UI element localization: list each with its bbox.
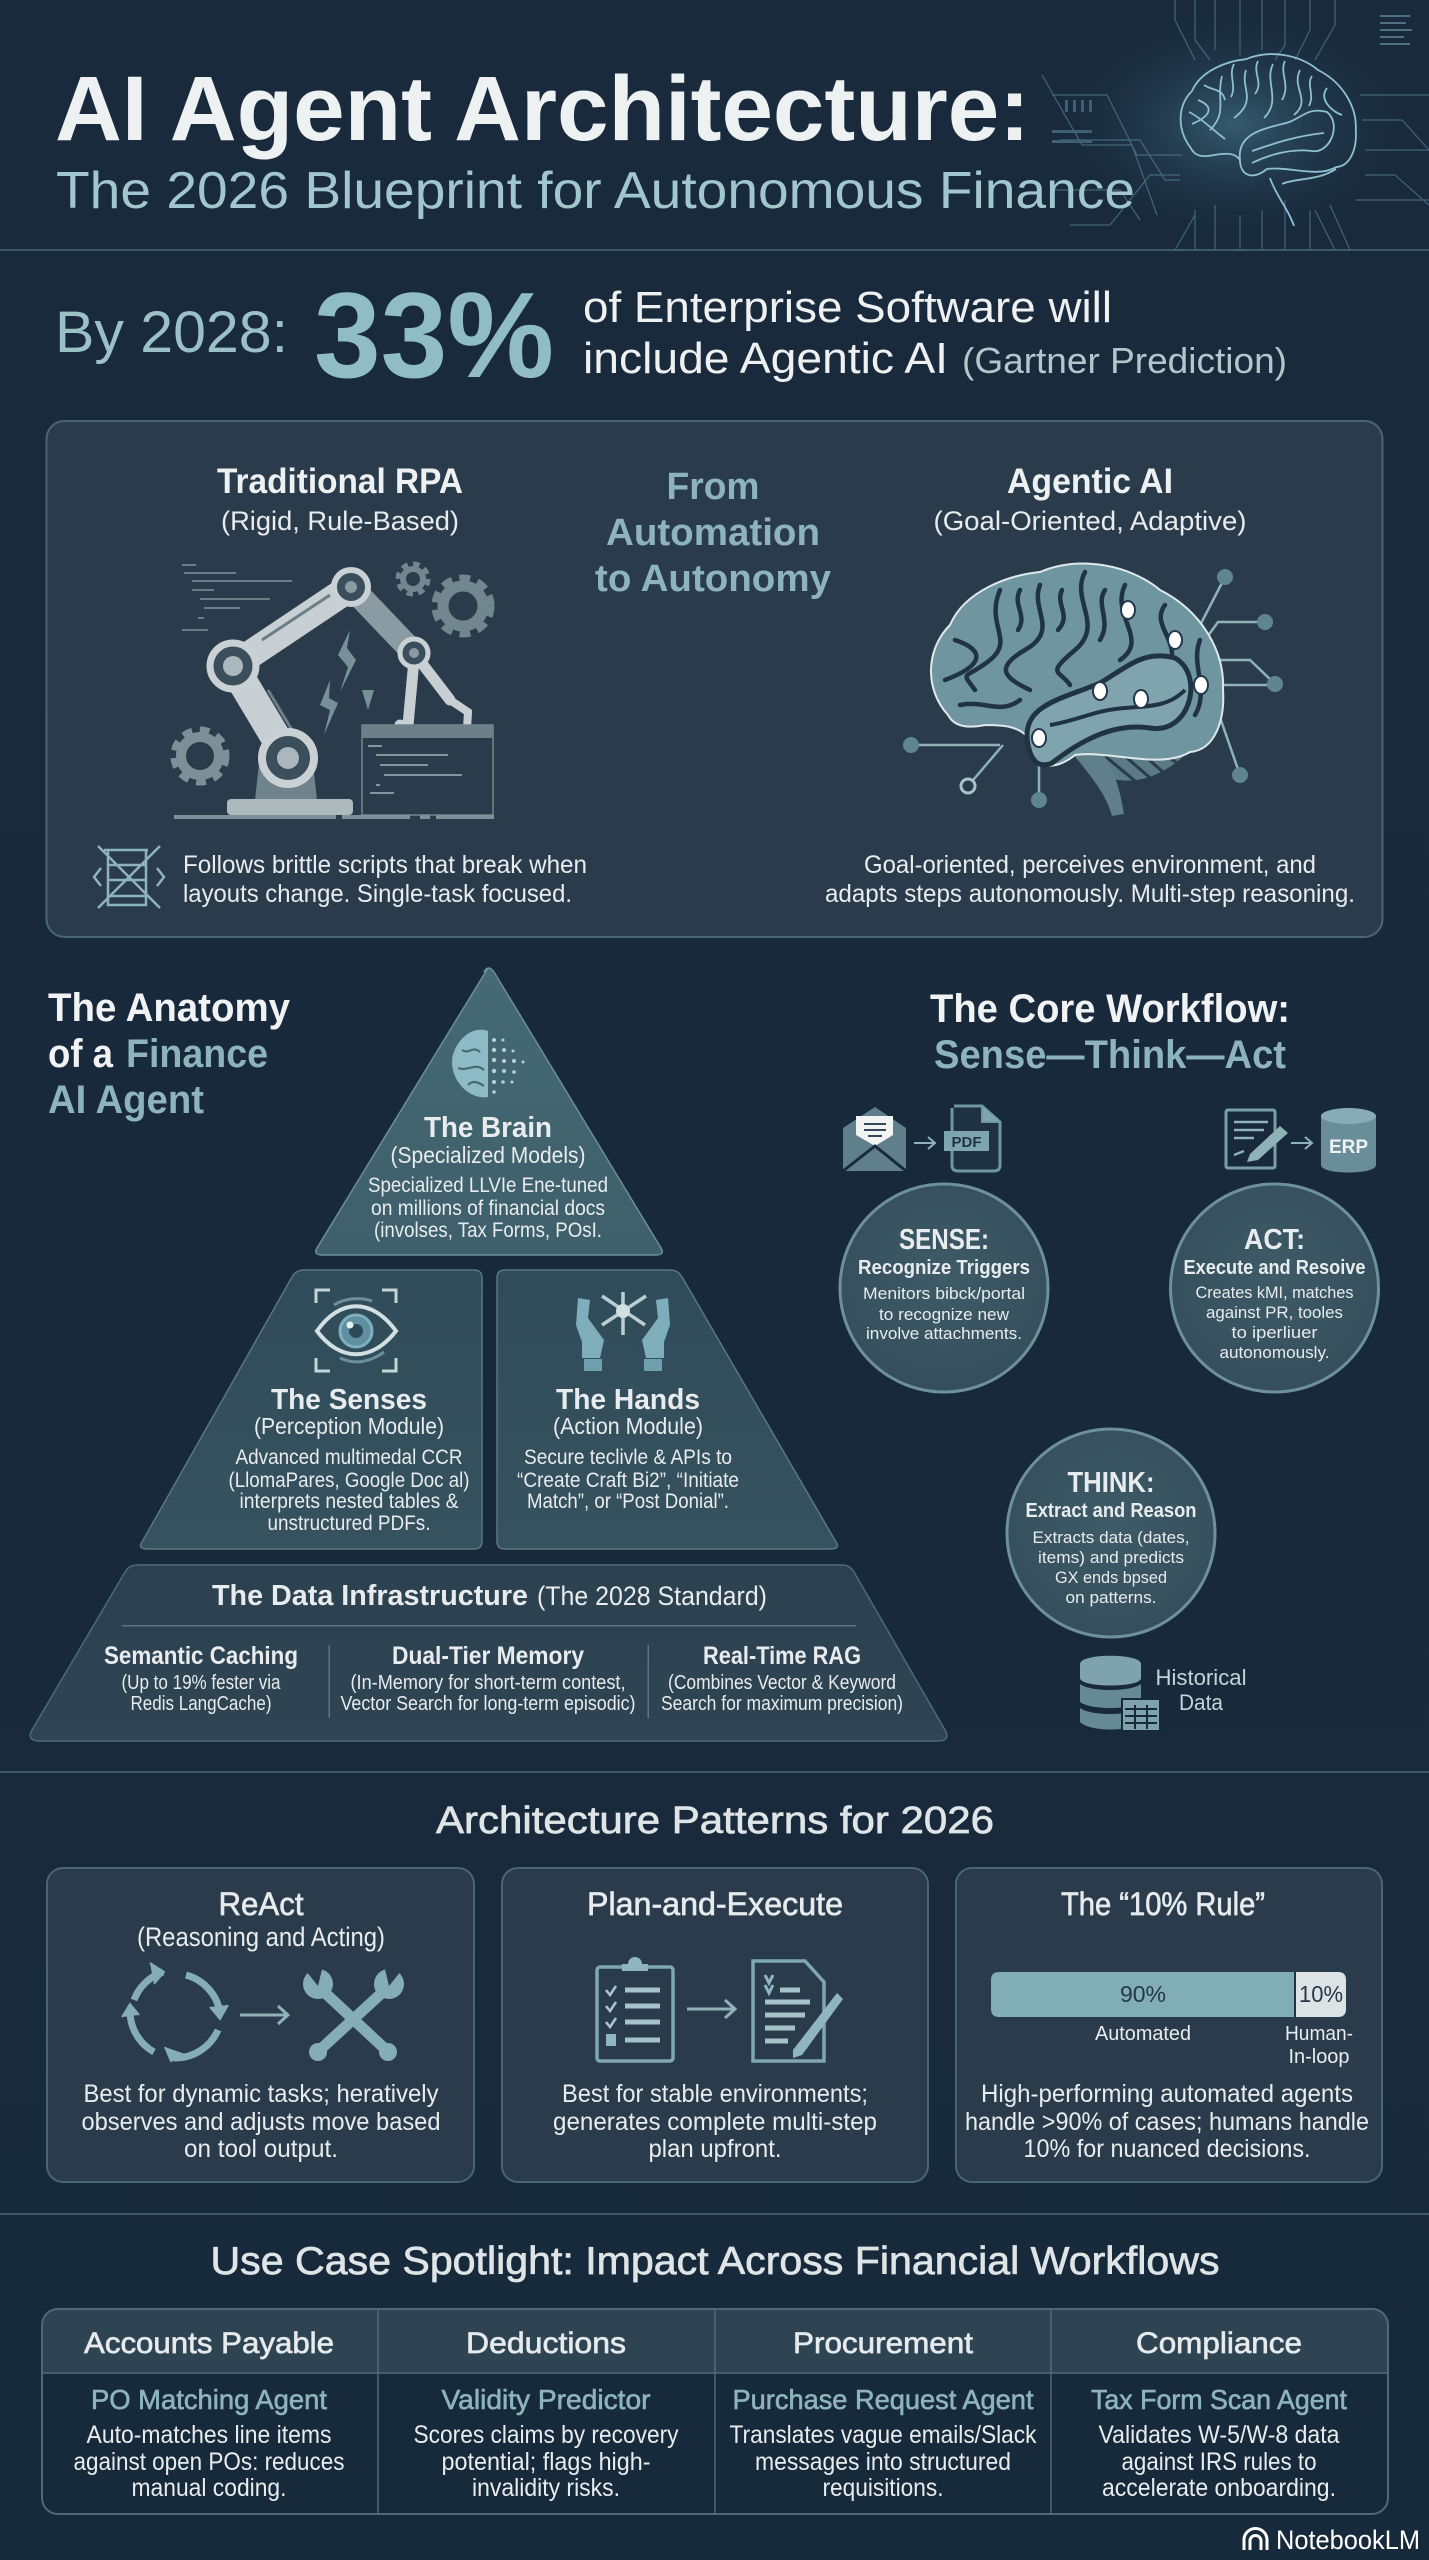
item: semantic caching: Redis LangCache) xyxy=(130,1693,272,1715)
card: the 10% rule: handle >90% of cases; humans handle xyxy=(965,2108,1369,2136)
heading: core workflow: The Core Workflow: xyxy=(930,987,1290,1031)
heading: anatomy of a finance AI agent: The Anatomy xyxy=(48,986,291,1030)
icon: historical data xyxy=(1080,1656,1246,1731)
column: accounts payable: against open POs: reduces xyxy=(74,2448,344,2476)
subtitle: The 2026 Blueprint for Autonomous Finance xyxy=(56,162,1135,220)
card: plan-and-execute xyxy=(502,1868,928,2182)
column: procurement: messages into structured xyxy=(755,2448,1011,2476)
heading: agentic AI: Agentic AI xyxy=(1007,462,1173,501)
logo: NotebookLM: NotebookLM xyxy=(1276,2525,1420,2555)
column: procurement: requisitions. xyxy=(822,2474,944,2502)
circle: act: autonomously. xyxy=(1220,1343,1330,1362)
icon: envelope to PDF: PDF xyxy=(952,1134,982,1151)
circle: sense: SENSE: xyxy=(899,1224,989,1256)
item: semantic caching xyxy=(104,1642,298,1715)
item: real-time RAG: Real-Time RAG xyxy=(703,1642,861,1670)
heading: use case spotlight: Use Case Spotlight: Impact Across Financial Workflows xyxy=(210,2240,1220,2283)
circle: act: to iperliuer xyxy=(1232,1323,1318,1342)
pyramid tier: the hands: The Hands xyxy=(556,1384,700,1416)
item: real-time RAG xyxy=(661,1642,903,1715)
item: dual-tier memory xyxy=(340,1642,636,1715)
circle: act: Execute and Resoive xyxy=(1184,1257,1366,1279)
column: accounts payable: Accounts Payable xyxy=(84,2327,334,2360)
pyramid tier: the brain: (involses, Tax Forms, POsI. xyxy=(374,1219,602,1242)
column: procurement: Purchase Request Agent xyxy=(732,2384,1034,2415)
circle: think: Extracts data (dates, xyxy=(1032,1528,1190,1547)
statistic: 33% prediction xyxy=(55,267,1287,403)
heading: agentic AI xyxy=(934,462,1246,536)
column: procurement xyxy=(730,2327,1037,2502)
center heading: from automation to autonomy: Automation xyxy=(606,512,820,554)
text: agentic description: Goal-oriented, perceives environment, and xyxy=(864,851,1316,879)
circle: sense: Menitors bibck/portal xyxy=(863,1284,1025,1303)
icon: arrow xyxy=(240,2006,288,2024)
icon: historical data: Data xyxy=(1179,1690,1224,1715)
text: agentic description: adapts steps autonomously. Multi-step reasoning. xyxy=(825,880,1355,908)
column: compliance: Compliance xyxy=(1136,2327,1302,2360)
column: accounts payable: manual coding. xyxy=(132,2474,286,2502)
circle: think: items) and predicts xyxy=(1038,1548,1184,1567)
card: the 10% rule: The “10% Rule” xyxy=(1061,1886,1265,1922)
pyramid tier: the hands: Match”, or “Post Donial”. xyxy=(527,1490,729,1513)
card: ReAct: observes and adjusts move based xyxy=(82,2108,440,2136)
center heading: from automation to autonomy xyxy=(595,466,831,600)
item: real-time RAG: (Combines Vector & Keyword xyxy=(668,1672,896,1694)
heading: agentic AI: (Goal-Oriented, Adaptive) xyxy=(934,506,1246,536)
card: plan-and-execute: Plan-and-Execute xyxy=(587,1886,843,1922)
pyramid: agent anatomy xyxy=(30,968,947,1741)
heading: anatomy of a finance AI agent: Finance xyxy=(126,1032,268,1076)
card: ReAct xyxy=(47,1868,474,2182)
icon: document edit to ERP: ERP xyxy=(1329,1137,1368,1158)
item: real-time RAG: Search for maximum precision) xyxy=(661,1693,903,1715)
circle: think: on patterns. xyxy=(1066,1588,1156,1607)
text: RPA description: layouts change. Single-task focused. xyxy=(183,880,572,908)
center heading: from automation to autonomy: From xyxy=(666,466,760,508)
chart: 90/10 split bar: Automated xyxy=(1095,2023,1191,2045)
circle: sense: involve attachments. xyxy=(866,1324,1022,1343)
pyramid tier: the hands: “Create Craft Bi2”, “Initiate xyxy=(517,1469,739,1492)
circle: think: Extract and Reason xyxy=(1026,1500,1196,1522)
text: agentic description xyxy=(825,851,1355,908)
card: ReAct: on tool output. xyxy=(184,2135,338,2163)
heading: anatomy of a finance AI agent: of a xyxy=(48,1032,114,1076)
column: compliance: accelerate onboarding. xyxy=(1102,2474,1336,2502)
pyramid tier: the senses: (LlomaPares, Google Doc al) xyxy=(228,1469,470,1492)
chart: 90/10 split bar: In-loop xyxy=(1288,2046,1350,2068)
circle: act: ACT: xyxy=(1244,1224,1305,1256)
pyramid tier: the senses: interprets nested tables & xyxy=(240,1490,458,1513)
statistic: 33% prediction: 33% xyxy=(314,267,554,403)
column: deductions: potential; flags high- xyxy=(442,2448,650,2476)
chart: 90/10 split bar: Human- xyxy=(1285,2023,1353,2045)
item: semantic caching: (Up to 19% fester via xyxy=(122,1672,281,1694)
statistic: 33% prediction: include Agentic AI xyxy=(583,334,948,383)
column: accounts payable: Auto-matches line items xyxy=(86,2421,332,2449)
heading: traditional RPA xyxy=(217,462,463,536)
icon: historical data: Historical xyxy=(1156,1665,1246,1690)
heading: anatomy of a finance AI agent: AI Agent xyxy=(48,1078,204,1122)
pyramid tier: the senses: (Perception Module) xyxy=(254,1413,444,1439)
pyramid tier: the hands: Secure teclivle & APIs to xyxy=(524,1446,732,1469)
icon: hands with tool xyxy=(576,1292,670,1371)
statistic: 33% prediction: of Enterprise Software will xyxy=(583,283,1112,332)
circle: think: THINK: xyxy=(1068,1467,1154,1499)
header: circuit brain illustration xyxy=(1040,0,1429,250)
heading: anatomy of a finance AI agent xyxy=(48,986,291,1122)
title: AI Agent Architecture: xyxy=(55,58,1030,160)
icon: agentic brain with network nodes xyxy=(903,564,1283,816)
icon: document edit to ERP xyxy=(1226,1108,1376,1172)
item: semantic caching: Semantic Caching xyxy=(104,1642,298,1670)
card: the 10% rule: High-performing automated agents xyxy=(981,2080,1353,2108)
statistic: 33% prediction: (Gartner Prediction) xyxy=(962,340,1287,381)
circle: act xyxy=(1170,1184,1378,1392)
icon: document with pencil xyxy=(753,1961,843,2061)
circle: sense xyxy=(840,1184,1048,1392)
panel: from automation to autonomy xyxy=(46,421,1382,937)
column: procurement: Translates vague emails/Slack xyxy=(730,2421,1037,2449)
pyramid tier: the senses xyxy=(140,1270,482,1549)
item: dual-tier memory: Vector Search for long-term episodic) xyxy=(340,1693,636,1715)
column: deductions: Deductions xyxy=(466,2327,626,2360)
heading: core workflow: Sense—Think—Act xyxy=(934,1033,1286,1077)
card: ReAct: (Reasoning and Acting) xyxy=(137,1922,385,1952)
circle: sense: Recognize Triggers xyxy=(858,1257,1030,1279)
column: procurement: Procurement xyxy=(793,2327,974,2360)
card: the 10% rule xyxy=(956,1868,1382,2182)
icon: half brain half data xyxy=(452,1030,524,1097)
icon: arrow xyxy=(687,2000,735,2018)
icon: envelope to PDF xyxy=(843,1106,1000,1171)
column: accounts payable xyxy=(74,2327,344,2502)
pyramid tier: the data infrastructure: (The 2028 Standard) xyxy=(537,1581,767,1611)
pyramid tier: the hands xyxy=(497,1270,838,1549)
pyramid tier: the data infrastructure: The Data Infrastructure xyxy=(212,1580,528,1612)
pyramid tier: the brain xyxy=(316,968,662,1255)
pyramid tier: the brain: The Brain xyxy=(424,1112,552,1144)
column: deductions: Scores claims by recovery xyxy=(414,2421,679,2449)
column: accounts payable: PO Matching Agent xyxy=(91,2384,327,2415)
circle: think: GX ends bpsed xyxy=(1055,1568,1167,1587)
pyramid tier: the data infrastructure xyxy=(30,1565,947,1741)
circle: act: Creates kMI, matches xyxy=(1196,1283,1354,1302)
chart: 90/10 split bar xyxy=(991,1972,1353,2068)
card: plan-and-execute: plan upfront. xyxy=(648,2135,782,2163)
circle: sense: to recognize new xyxy=(879,1305,1010,1324)
column: deductions xyxy=(414,2327,679,2502)
pyramid tier: the senses: unstructured PDFs. xyxy=(268,1512,430,1535)
table: use cases xyxy=(42,2309,1388,2514)
text: RPA description: Follows brittle scripts that break when xyxy=(183,851,587,879)
circle: think xyxy=(1007,1429,1215,1637)
item: dual-tier memory: (In-Memory for short-term contest, xyxy=(350,1672,626,1694)
heading: architecture patterns: Architecture Patterns for 2026 xyxy=(436,1800,994,1842)
icon: crossed-out script xyxy=(94,846,164,908)
pyramid tier: the hands: (Action Module) xyxy=(553,1413,703,1439)
statistic: 33% prediction: By 2028: xyxy=(55,300,288,365)
card: the 10% rule: 10% for nuanced decisions. xyxy=(1024,2135,1310,2163)
chart: 90/10 split bar: 90% xyxy=(1120,1981,1166,2007)
column: compliance: Tax Form Scan Agent xyxy=(1091,2384,1347,2415)
pyramid tier: the brain: Specialized LLVIe Ene-tuned xyxy=(368,1174,608,1197)
heading: core workflow xyxy=(930,987,1290,1077)
card: ReAct: Best for dynamic tasks; heratively xyxy=(84,2080,439,2108)
pyramid tier: the brain: on millions of financial docs xyxy=(371,1197,605,1220)
card: plan-and-execute: Best for stable environments; xyxy=(562,2080,868,2108)
pyramid tier: the senses: Advanced multimedal CCR xyxy=(236,1446,462,1469)
icon: checklist clipboard xyxy=(597,1957,673,2061)
pyramid tier: the brain: (Specialized Models) xyxy=(390,1142,586,1168)
column: deductions: invalidity risks. xyxy=(472,2474,620,2502)
column: compliance: against IRS rules to xyxy=(1122,2448,1316,2476)
card: ReAct: ReAct xyxy=(218,1886,304,1922)
heading: traditional RPA: (Rigid, Rule-Based) xyxy=(221,506,459,536)
icon: robot arm with gears and code xyxy=(174,565,494,817)
column: deductions: Validity Predictor xyxy=(442,2384,650,2415)
icon: crossed wrenches xyxy=(302,1961,405,2061)
icon: cycle arrows xyxy=(122,1963,228,2061)
center heading: from automation to autonomy: to Autonomy xyxy=(595,558,831,600)
column: compliance: Validates W-5/W-8 data xyxy=(1098,2421,1340,2449)
column: compliance xyxy=(1091,2327,1347,2502)
item: dual-tier memory: Dual-Tier Memory xyxy=(392,1642,584,1670)
heading: traditional RPA: Traditional RPA xyxy=(217,462,463,501)
chart: 90/10 split bar: 10% xyxy=(1299,1981,1343,2007)
text: RPA description xyxy=(183,851,587,908)
pyramid tier: the senses: The Senses xyxy=(271,1384,427,1416)
card: plan-and-execute: generates complete multi-step xyxy=(553,2108,877,2136)
circle: act: against PR, tooles xyxy=(1206,1303,1343,1322)
icon: eye in focus frame xyxy=(316,1290,396,1371)
